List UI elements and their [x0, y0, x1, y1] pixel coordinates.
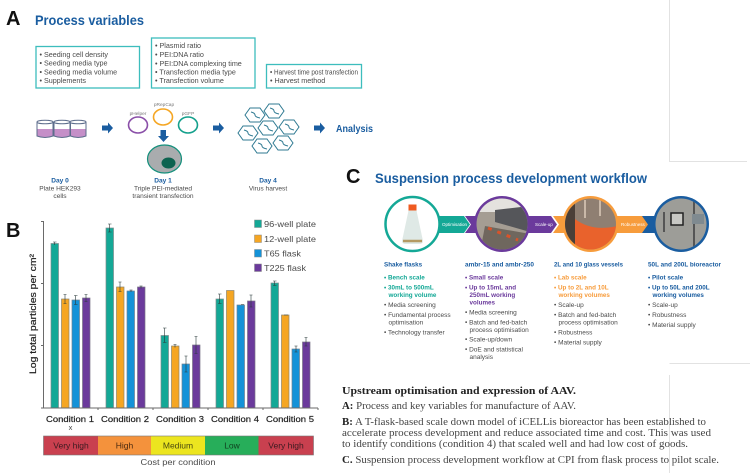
column: ambr: volumes [470, 300, 496, 306]
caption B: B: A T-flask-based scale down model of iCELLis bioreactor has been established to [342, 417, 706, 428]
column: bioreactor: • Scale-up [648, 302, 678, 309]
axes [41, 221, 318, 410]
column: shake flasks: • Bench scale [384, 274, 425, 282]
caption B: accelerate process development and reduce associated time and cost. This was used [342, 428, 711, 439]
legend: T65 flask [264, 248, 302, 258]
photo: ambr system [474, 196, 530, 252]
label: day 0: Day 0 [51, 178, 69, 184]
box: seeding variables: • Seeding media type [40, 58, 108, 68]
cost per condition scale: High [116, 440, 134, 450]
bars: T225 flask [82, 287, 310, 408]
condition labels: Condition 4 [211, 414, 259, 424]
box: transfection variables: • Transfection volume [155, 76, 224, 85]
column: glass vessels: working volumes [558, 292, 610, 299]
box: seeding variables: • Seeding media volume [40, 68, 117, 76]
caption C: C. Suspension process development workflow at CPI from flask process to pilot scale. [342, 455, 719, 466]
label: day 4 [249, 178, 287, 192]
cost per condition scale [44, 436, 314, 467]
arrow: robustness [553, 216, 650, 233]
column: ambr: ambr-15 and ambr-250 [465, 262, 535, 268]
arrow: scale-up: Scale-up [535, 222, 553, 227]
column: shake flasks: Shake flasks [384, 262, 423, 268]
cost per condition scale: Very high [53, 440, 89, 450]
box: seeding variables [36, 46, 140, 88]
column: glass vessels: • Up to 2L and 10L [554, 284, 609, 292]
label: day 4: Day 4 [259, 178, 277, 184]
panel A: process variables [6, 8, 373, 200]
column: bioreactor: • Pilot scale [648, 274, 684, 282]
column: ambr: • Small scale [465, 274, 504, 282]
icon: transfected cell [148, 145, 182, 173]
column: glass vessels: • Scale-up [554, 302, 584, 309]
arrow: optimisation: Optimisation [442, 222, 468, 227]
caption B [342, 417, 711, 450]
condition labels: Condition 2 [101, 414, 149, 424]
column: glass vessels: • Lab scale [554, 274, 587, 282]
photo: shake flask [386, 197, 440, 251]
error bars [53, 224, 308, 372]
cost per condition scale: Very high [268, 440, 304, 450]
box: transfection variables: • PEI:DNA complexing time [155, 59, 242, 68]
column: bioreactor: working volumes [652, 292, 704, 299]
column: glass vessels: • Robustness [554, 330, 593, 336]
icon: culture plate wells [37, 120, 86, 138]
condition labels [46, 414, 314, 432]
legend [254, 219, 316, 273]
arrow: plasmids to cell [158, 130, 169, 142]
arrow: scale-up [465, 216, 557, 233]
box: transfection variables [152, 38, 255, 88]
legend: T225 flask [264, 263, 307, 273]
arrow: optimisation [436, 216, 470, 233]
cost per condition scale: Cost per condition [140, 457, 216, 467]
label: day 4: Virus harvest [249, 186, 287, 192]
column: ambr: • Media screening [465, 310, 517, 316]
column: shake flasks: • 30mL to 500mL [384, 284, 434, 292]
bars: T65 flask [72, 291, 300, 408]
caption A: A: Process and key variables for manufacture of AAV. [342, 401, 576, 412]
box: seeding variables: • Seeding cell density [40, 50, 108, 59]
box: transfection variables: • Plasmid ratio [155, 41, 201, 50]
label: day 0: cells [53, 193, 67, 200]
box: harvest variables: • Harvest method [270, 76, 325, 85]
cost per condition scale: Low [224, 440, 241, 450]
caption B: to identify conditions (condition 4) that scaled well and had low cost of goods. [342, 439, 688, 450]
condition labels: Condition 1 [46, 414, 94, 424]
box: seeding variables: • Supplements [40, 76, 86, 85]
cost per condition scale: Medium [163, 440, 193, 450]
column: bioreactor: • Up to 50L and 200L [648, 284, 710, 292]
caption text [342, 386, 719, 466]
column: bioreactor [648, 262, 722, 329]
column: glass vessels: process optimisation [558, 320, 618, 326]
bars: 12-well plate [62, 287, 289, 408]
panel letter C: C [346, 166, 360, 188]
label: analysis: Analysis [336, 123, 373, 135]
column: glass vessels [554, 262, 623, 346]
column: glass vessels: 2L and 10 glass vessels [554, 262, 623, 268]
column: shake flasks: • Technology transfer [384, 330, 446, 336]
panel letter B: B [6, 220, 20, 242]
column: bioreactor: • Robustness [648, 312, 687, 319]
column: ambr: analysis [470, 354, 494, 361]
photo: glass vessel [562, 196, 619, 252]
icon: plasmids: pRepCap [154, 102, 174, 108]
column: ambr: process optimisation [470, 327, 529, 334]
column: shake flasks: • Fundamental process [384, 312, 451, 319]
box: transfection variables: • Transfection media type [155, 68, 236, 76]
panel C: suspension workflow [346, 166, 722, 361]
label: day 1: Triple PEI-mediated [134, 186, 192, 192]
y axis label: Log total particles per cm² [28, 254, 39, 374]
box: harvest variables: • Harvest time post transfection [270, 68, 358, 76]
column: ambr: • Scale-up/down [465, 336, 512, 344]
column: glass vessels: • Batch and fed-batch [554, 312, 617, 319]
icon: plasmids: pHelper [130, 111, 147, 117]
column: glass vessels: • Material supply [554, 340, 603, 346]
label: day 0: Plate HEK293 [39, 186, 81, 192]
icon: virus hexagons [238, 104, 299, 153]
arrow: to analysis [314, 122, 325, 134]
bars: 96-well plate [51, 228, 278, 408]
column: shake flasks: • Media screening [384, 302, 436, 309]
arrow: day 1 to day 4 [213, 122, 224, 134]
column: shake flasks [384, 262, 451, 336]
title: suspension workflow: Suspension process development workflow [375, 170, 647, 186]
condition labels: Condition 3 [156, 414, 204, 424]
condition labels: Condition 5 [266, 414, 314, 424]
photo: bioreactor [653, 196, 709, 252]
arrow: day 0 to day 1 [102, 122, 113, 134]
condition labels: x [69, 423, 73, 432]
arrow: robustness: Robustness [621, 222, 646, 227]
column: ambr: • Up to 15mL and [465, 284, 516, 292]
box: transfection variables: • PEI:DNA ratio [155, 50, 204, 59]
legend: 12-well plate [264, 234, 316, 244]
panel letter A: A [6, 8, 20, 30]
title: process variables: Process variables [35, 12, 144, 28]
box: harvest variables [266, 64, 362, 88]
column: bioreactor: 50L and 200L bioreactor [648, 262, 722, 268]
column: ambr: 250mL working [470, 292, 515, 299]
label: day 1 [132, 178, 194, 200]
label: day 1: transient transfection [132, 193, 194, 200]
column: ambr: • Batch and fed-batch [465, 320, 528, 326]
icon: plasmids [128, 102, 198, 133]
legend: 96-well plate [264, 219, 316, 229]
panel B: bar chart [6, 219, 318, 467]
column: ambr [465, 262, 535, 361]
label: day 1: Day 1 [154, 178, 172, 184]
icon: plasmids: pGFP [182, 111, 194, 117]
column: shake flasks: optimisation [388, 320, 424, 326]
arrow head: blue [642, 216, 660, 233]
label: day 0 [39, 178, 81, 200]
column: ambr: • DoE and statistical [465, 346, 523, 354]
caption heading: Upstream optimisation and expression of AAV. [342, 386, 577, 397]
column: shake flasks: working volume [388, 292, 437, 299]
column: bioreactor: • Material supply [648, 322, 697, 329]
